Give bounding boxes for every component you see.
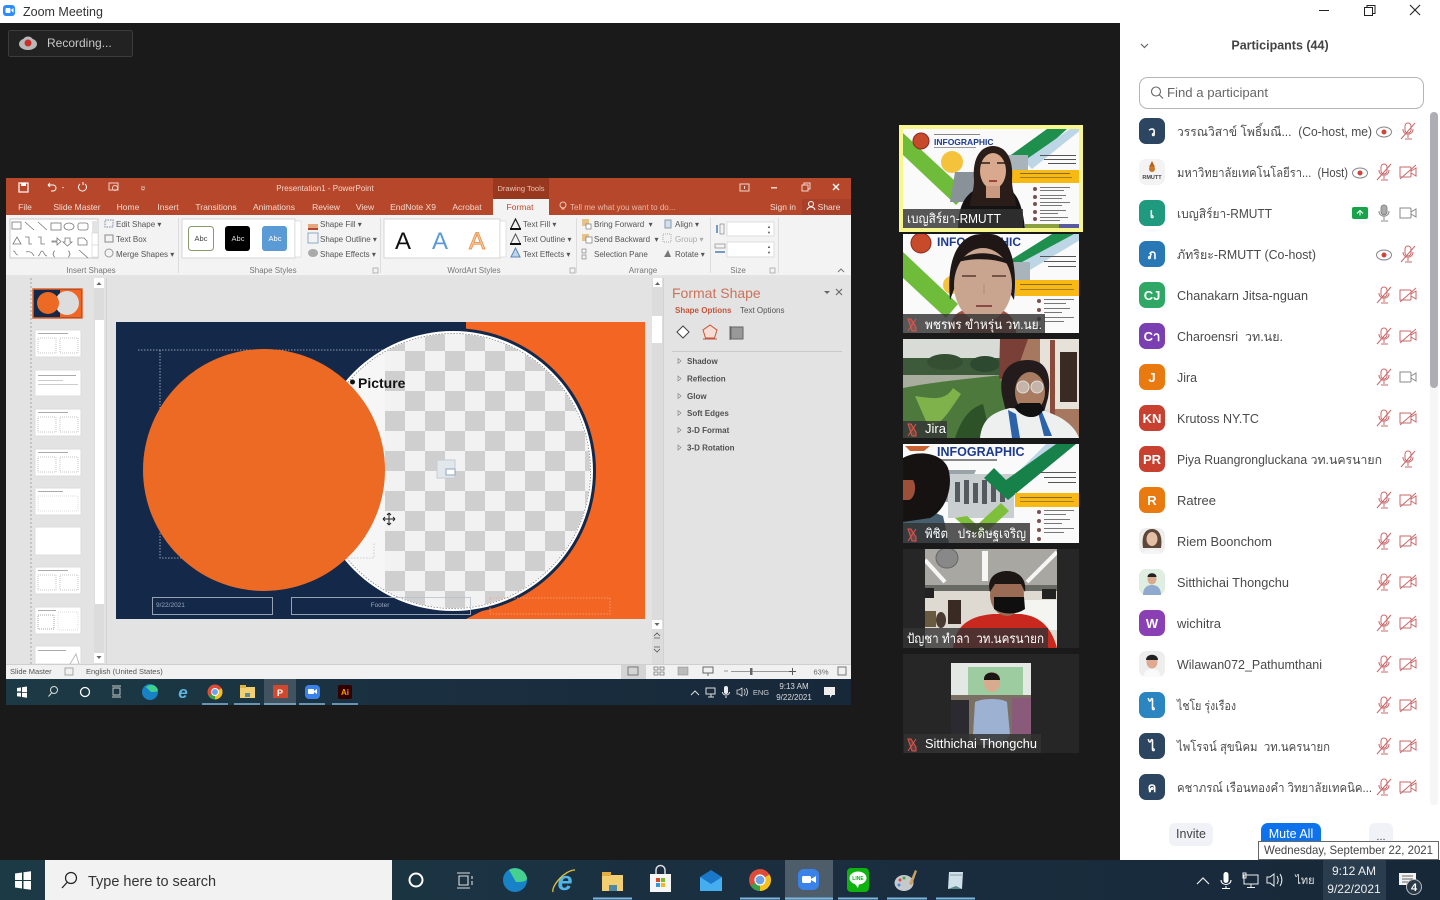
participant row 14: Wilawan072_Pathumthani (1177, 658, 1322, 672)
windows taskbar (0, 860, 1440, 900)
speaker name label (903, 209, 1023, 228)
ribbon tabs: Sign in (770, 202, 796, 212)
arrange group (582, 219, 705, 275)
footer placeholder: Footer (371, 602, 390, 609)
thumbnail pane (6, 277, 106, 664)
ribbon tabs: Transitions (195, 202, 237, 212)
search box: Type here to search (88, 873, 216, 890)
PowerPoint status bar: English (United States) (86, 667, 163, 676)
video tile: speaker: INFOGRAPHIC (934, 137, 994, 147)
icon: edge (503, 868, 527, 892)
participant row 8: Krutoss NY.TC (1177, 412, 1259, 426)
PowerPoint title bar: Drawing Tools (498, 184, 545, 193)
search box (1140, 78, 1424, 108)
search box (45, 860, 392, 900)
slide scrollbar (652, 278, 664, 664)
insert shapes group: Text Box (116, 235, 147, 244)
participant row 8: KN (1143, 411, 1161, 426)
format shape options list (678, 357, 735, 452)
mute all button (1261, 823, 1321, 853)
mute all button: Mute All (1269, 827, 1313, 841)
window controls (1319, 5, 1420, 16)
ribbon tabs: File (18, 202, 32, 212)
participant row 6: Charoensri วท.นย. (1177, 330, 1283, 344)
shape styles group: Shape Effects ▾ (320, 250, 376, 259)
panel heading (1141, 38, 1329, 52)
video tile: Jira (903, 339, 1079, 438)
participant row 2 (1139, 159, 1416, 185)
size group: ▼ (767, 250, 771, 255)
participant row 9: Piya Ruangrongluckana วท.นครนายก (1177, 453, 1382, 467)
recording indicator (8, 30, 132, 56)
shared screen tray and clock (691, 682, 835, 702)
wordart styles group: WordArt Styles (447, 266, 501, 275)
participant 2 name label: พชรพร ขำหรุ่น วท.นย. (925, 317, 1042, 333)
participant row 13 (1139, 610, 1416, 636)
thumbnail scrollbar (94, 278, 106, 664)
icon: internet explorer (553, 866, 575, 896)
video tile: participant 2: INFOGRAPHIC (937, 235, 1021, 249)
shape styles group: Shape Outline ▾ (320, 235, 377, 244)
system tray: 9/22/2021 (1327, 882, 1381, 896)
participant row 6: Cา (1144, 329, 1160, 344)
orange circle (143, 349, 385, 591)
zoom window title bar (0, 0, 1120, 23)
participant row 12 (1139, 569, 1416, 595)
participant 2 name label (903, 314, 1045, 333)
participant row 13: wichitra (1176, 617, 1221, 631)
size group: Size (730, 266, 746, 275)
icon: zoom active (785, 860, 833, 900)
shape styles group: Shape Styles (249, 266, 297, 275)
video tile: participant 4: INFOGRAPHIC (937, 445, 1024, 459)
participant row 14 (1139, 651, 1416, 677)
participant row 11: Riem Boonchom (1177, 535, 1272, 549)
slide canvas (116, 322, 645, 620)
participant row 11 (1139, 528, 1416, 554)
participant row 10 (1139, 487, 1416, 513)
participant row 12: Sitthichai Thongchu (1177, 576, 1289, 590)
format shape pane: Format Shape (672, 285, 761, 301)
participant row 17 (1139, 774, 1416, 800)
taskbar app icons: P (277, 688, 283, 698)
shape styles group: Abc (269, 234, 282, 243)
participant row 10: Ratree (1177, 494, 1216, 508)
participant row 2: RMUTT (1142, 175, 1162, 181)
arrange group: Bring Forward ▾ (594, 220, 653, 229)
wordart styles group: A (469, 228, 485, 255)
system tray: ไทย (1294, 874, 1315, 887)
video tile: speaker (899, 125, 1083, 232)
taskbar app icons: e (178, 683, 188, 702)
invite button: Invite (1176, 827, 1206, 841)
participant row 17: คชาภรณ์ เรือนทองคำ วิทยาลัยเทคนิค... (1177, 781, 1372, 795)
picture placeholder circle (344, 328, 596, 612)
participant row 3 (1139, 200, 1416, 226)
Jira name label: Jira (925, 421, 947, 436)
video tile: participant 4 (903, 444, 1079, 543)
ribbon tabs: Share (818, 202, 841, 212)
participant row 4 (1139, 241, 1415, 267)
more button (1369, 823, 1393, 846)
Sitthichai name label: Sitthichai Thongchu (925, 736, 1037, 751)
icon: chrome (749, 869, 771, 891)
ribbon tabs: Review (312, 202, 341, 212)
Jira name label (903, 421, 947, 438)
move cursor (383, 513, 395, 525)
shared screen taskbar (6, 679, 851, 705)
shared screen tray and clock: 9:13 AM (779, 682, 809, 691)
participant row 15: ไชโย รุ่งเรือง (1176, 698, 1236, 714)
participant row 3: เบญสิร์ยา-RMUTT (1177, 207, 1272, 221)
participant 4 name label: พิชิต ประดิษฐเจริญ (925, 526, 1026, 542)
insert shapes group: Merge Shapes ▾ (116, 250, 174, 259)
shape styles group (182, 219, 378, 275)
start button (15, 871, 31, 890)
zoom window title bar: Zoom Meeting (23, 5, 103, 19)
video tile column (899, 125, 1083, 753)
active slide thumbnail (33, 289, 82, 318)
format shape options list: Glow (687, 392, 707, 401)
Sitthichai name label (904, 734, 1041, 753)
system tray (1197, 860, 1386, 900)
wordart styles group: A (395, 228, 411, 255)
ribbon tabs: View (356, 202, 375, 212)
icon: notepad (948, 872, 963, 889)
icon: internet explorer: e (557, 866, 573, 896)
ribbon tabs: Insert (157, 202, 179, 212)
size group: ▲ (767, 224, 771, 229)
format shape options list: 3-D Rotation (687, 444, 735, 452)
insert shapes group: Edit Shape ▾ (116, 220, 161, 229)
size group: ▼ (767, 230, 771, 235)
size group: ▲ (767, 244, 771, 249)
ribbon tabs: Tell me what you want to do... (570, 203, 675, 212)
placeholder outlines (138, 350, 610, 614)
shared screen tray and clock: 9/22/2021 (776, 693, 812, 702)
participant row 4: ภ (1148, 247, 1156, 262)
wordart styles group: Text Outline ▾ (523, 235, 571, 244)
ribbon tabs: Acrobat (452, 202, 482, 212)
participant row 16: ไ (1147, 738, 1156, 754)
system tray: 9:12 AM (1332, 864, 1376, 878)
participant 4 name label (903, 523, 1030, 543)
ribbon tabs: Slide Master (53, 202, 101, 212)
PowerPoint status bar: Slide Master (10, 667, 52, 676)
PowerPoint title bar: Presentation1 - PowerPoint (276, 184, 374, 193)
participant row 9 (1139, 446, 1415, 472)
shared screen: PowerPoint window (6, 178, 851, 705)
date tooltip: Wednesday, September 22, 2021 (1264, 843, 1433, 857)
cortana button (410, 874, 422, 886)
participant 5 name label (903, 628, 1048, 648)
icon: store (650, 866, 671, 892)
wordart styles group: A (432, 228, 448, 255)
participant row 16: ไพโรจน์ สุขนิคม วท.นครนายก (1176, 739, 1330, 755)
search box: Find a participant (1167, 85, 1268, 100)
ribbon tabs: Format (507, 202, 534, 212)
participant row 13: W (1146, 616, 1159, 631)
participant row 7 (1139, 364, 1416, 390)
arrange group: Align ▾ (675, 220, 699, 229)
participant row 5: CJ (1144, 288, 1160, 303)
arrange group: Selection Pane (594, 250, 648, 259)
participant row 3: เ (1150, 206, 1154, 221)
icon: file explorer (602, 872, 623, 891)
taskbar app icons (142, 679, 358, 705)
notification center badge (1399, 873, 1422, 894)
participants scrollbar (1430, 112, 1438, 805)
video tile: participant 5 (903, 548, 1079, 648)
invite button (1169, 823, 1213, 846)
arrange group: Group ▾ (675, 235, 703, 244)
participant row 1: วรรณวิสาข์ โพธิ์มณี... (Co-host, me) (1177, 122, 1372, 139)
participant row 7: Jira (1177, 371, 1197, 385)
participant row 6 (1139, 323, 1416, 349)
PowerPoint status bar (6, 664, 851, 679)
footer date placeholder: 9/22/2021 (156, 602, 185, 609)
participant row 5: Chanakarn Jitsa-nguan (1177, 289, 1308, 303)
recording indicator: Recording... (47, 36, 112, 50)
PowerPoint status bar: 63% (813, 668, 829, 676)
participant row 15 (1139, 692, 1416, 718)
video tile: participant 2 (903, 233, 1080, 333)
task view button (457, 873, 472, 888)
wordart styles group (384, 219, 575, 275)
format shape pane: Shape Options (675, 306, 732, 315)
shape styles group: Abc (232, 234, 245, 243)
participant row 8 (1139, 405, 1416, 431)
insert shapes group: Insert Shapes (66, 266, 116, 275)
participant row 5 (1139, 282, 1416, 308)
notification center badge: 4 (1411, 882, 1418, 894)
icon: line: LINE (852, 876, 864, 882)
taskbar app icons: Ai (341, 688, 349, 697)
arrange group: Rotate ▾ (675, 250, 705, 259)
participant 5 name label: ปัญชา ทำลา วท.นครนายก (907, 631, 1044, 646)
ribbon (6, 215, 851, 277)
participant row 2: มหาวิทยาลัยเทคโนโลยีรา... (Host) (1177, 165, 1348, 180)
arrange group: Arrange (629, 266, 658, 275)
format shape options list: Soft Edges (687, 409, 729, 418)
speaker name label: เบญสิร์ยา-RMUTT (907, 211, 1001, 226)
PowerPoint title bar (6, 178, 851, 215)
participant row 17: ค (1148, 780, 1156, 795)
video tile: Sitthichai (903, 654, 1079, 753)
participant row 1 (1139, 118, 1415, 144)
insert shapes group (10, 219, 174, 275)
participant row 15: ไ (1147, 697, 1156, 713)
icon: size and properties (730, 326, 743, 340)
icon: paint (894, 870, 917, 891)
participant row 4: ภัทริยะ-RMUTT (Co-host) (1177, 248, 1316, 262)
ribbon tabs (18, 199, 851, 215)
icon: line (847, 868, 869, 892)
participant row 9: PR (1143, 452, 1162, 467)
more button: ... (1376, 831, 1386, 843)
shared screen tray and clock: ENG (753, 688, 769, 697)
participant row 10: R (1147, 493, 1157, 508)
slide thumbnails list (35, 330, 81, 664)
picture placeholder label: Picture (358, 375, 406, 391)
format shape options list: Shadow (687, 357, 718, 366)
participants panel (1120, 0, 1440, 860)
taskbar start and search (17, 686, 121, 698)
shape styles group: Shape Fill ▾ (320, 220, 362, 229)
panel heading: Participants (44) (1231, 38, 1329, 52)
ribbon tabs: Animations (253, 202, 295, 212)
format shape pane: Text Options (740, 306, 784, 315)
format shape pane (672, 285, 842, 452)
participant row 1: ว (1148, 124, 1156, 139)
shape styles group: Abc (195, 234, 208, 243)
icon: effects pentagon (703, 325, 717, 339)
participant row 16 (1139, 733, 1416, 759)
participant row 7: J (1148, 370, 1156, 385)
format shape options list: Reflection (687, 374, 726, 384)
format shape options list: 3-D Format (687, 426, 730, 435)
icon: fill bucket (677, 326, 689, 338)
ribbon tabs: Home (117, 202, 140, 212)
arrange group: Send Backward ▾ (594, 235, 658, 244)
wordart styles group: Text Fill ▾ (523, 220, 556, 229)
ribbon tabs: EndNote X9 (390, 202, 436, 212)
running app indicators (593, 898, 975, 900)
icon: mail (700, 870, 722, 891)
wordart styles group: Text Effects ▾ (523, 250, 570, 259)
size group (715, 222, 844, 275)
